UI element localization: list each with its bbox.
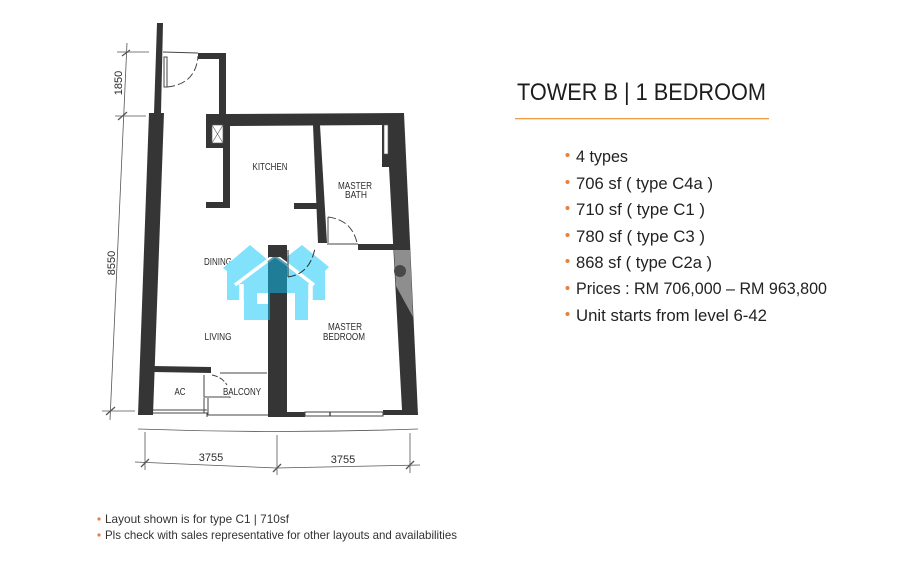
- bullet list: 868 sf ( type C2a ): [576, 254, 712, 272]
- room labels: BEDROOM: [323, 332, 365, 343]
- room labels: MASTER: [328, 322, 362, 333]
- footnotes: Pls check with sales representative for other layouts and availabilities: [105, 528, 457, 542]
- footnotes: Layout shown is for type C1 | 710sf: [105, 512, 290, 526]
- room labels: LIVING: [204, 332, 232, 343]
- vertical dimension lines: 1850: [113, 71, 125, 95]
- service shaft: [212, 125, 223, 143]
- horizontal dimension lines: 3755: [331, 454, 355, 466]
- bullet list: Prices : RM 706,000 – RM 963,800: [576, 280, 827, 298]
- title underline: [515, 118, 769, 119]
- bullet list: Unit starts from level 6-42: [576, 307, 767, 325]
- vertical dimension lines: 8550: [106, 251, 118, 275]
- room labels: BALCONY: [223, 387, 261, 398]
- room labels: [174, 162, 372, 398]
- footnotes: [97, 512, 457, 542]
- bullet list: 706 sf ( type C4a ): [576, 175, 713, 193]
- bullet list: [566, 148, 827, 325]
- wall seen through the logo: [268, 257, 287, 320]
- watermark: house logo: [223, 245, 329, 320]
- bullet list: 4 types: [576, 148, 628, 166]
- horizontal dimension lines: [135, 429, 420, 475]
- bullet list: 710 sf ( type C1 ): [576, 201, 705, 219]
- floor plan: [102, 23, 420, 475]
- walls: [138, 23, 418, 417]
- vertical dimension lines: [102, 43, 149, 420]
- title: TOWER B | 1 BEDROOM: [517, 79, 766, 106]
- watermark: faded letter on right wall: [394, 250, 413, 317]
- room labels: MASTER: [338, 181, 372, 192]
- room labels: BATH: [345, 190, 367, 201]
- room labels: DINING: [204, 257, 232, 268]
- doors and thin walls: [153, 52, 383, 417]
- room labels: KITCHEN: [252, 162, 288, 173]
- horizontal dimension lines: 3755: [199, 452, 223, 464]
- bath niche detail: [384, 125, 388, 154]
- door sweep over the logo: [288, 248, 315, 277]
- room labels: AC: [174, 387, 186, 398]
- bullet list: 780 sf ( type C3 ): [576, 228, 705, 246]
